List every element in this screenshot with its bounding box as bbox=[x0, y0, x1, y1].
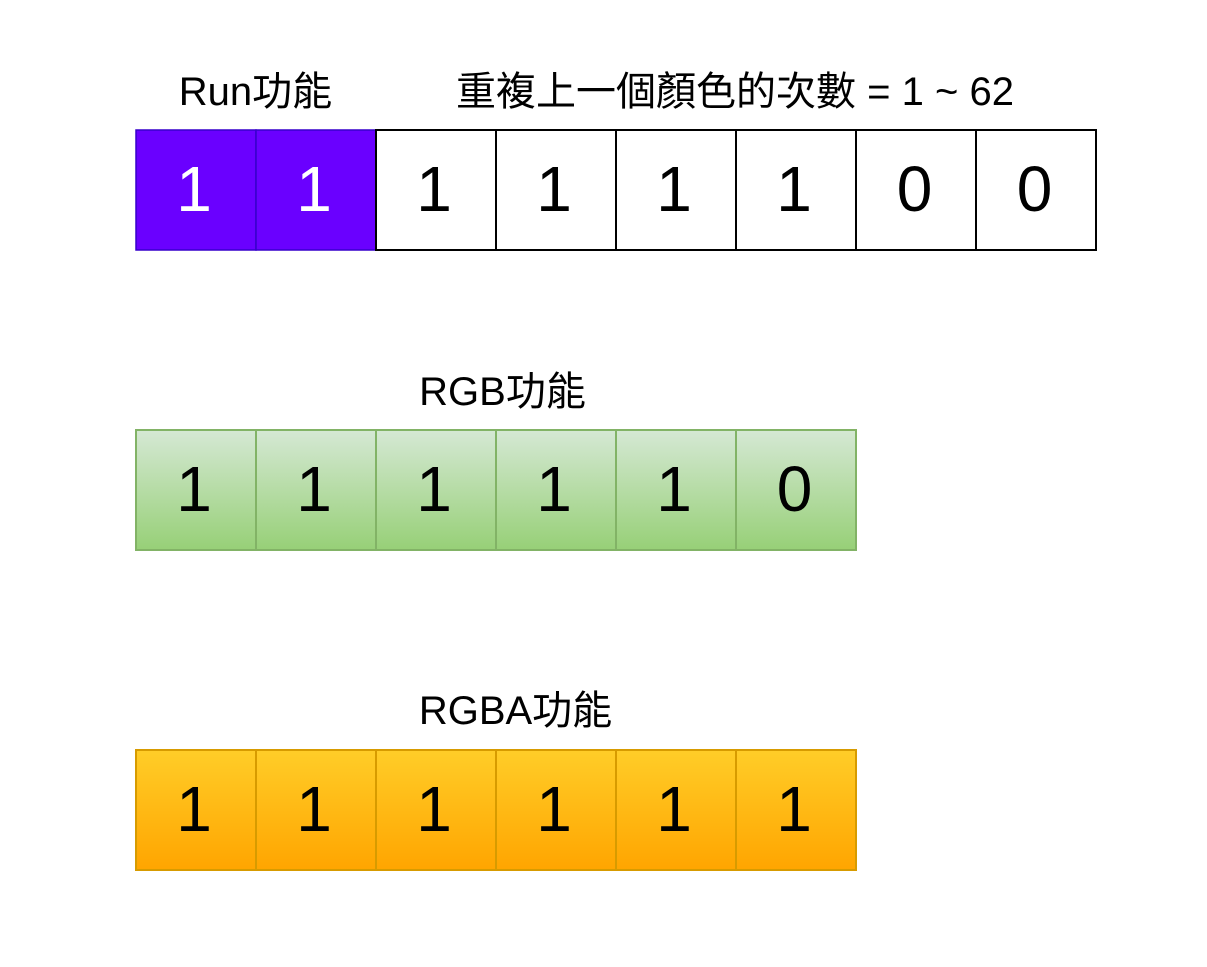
row: RGBA bits: 1 bbox=[656, 773, 692, 845]
heading: RGBA function: RGBA功能 bbox=[419, 689, 612, 733]
row: RGBA bits bbox=[136, 750, 856, 870]
row: Run bits: 1 bbox=[296, 153, 332, 225]
heading: Run function: Run功能 bbox=[179, 70, 332, 114]
row: RGB bits: 1 bbox=[416, 453, 452, 525]
row: Run bits: 1 bbox=[416, 153, 452, 225]
row: RGBA bits: 1 bbox=[296, 773, 332, 845]
heading: RGB function: RGB功能 bbox=[419, 370, 586, 414]
row: RGB bits: 1 bbox=[656, 453, 692, 525]
row: RGB bits: 1 bbox=[536, 453, 572, 525]
row: Run bits: 0 bbox=[897, 153, 932, 225]
row: RGB bits: 1 bbox=[176, 453, 212, 525]
row: RGB bits: 0 bbox=[777, 453, 812, 525]
row: RGBA bits: 1 bbox=[416, 773, 452, 845]
row: Run bits: 1 bbox=[656, 153, 692, 225]
row: RGBA bits: 1 bbox=[776, 773, 812, 845]
row: RGB bits bbox=[136, 430, 856, 550]
heading: repeat count: 重複上一個顏色的次數 = 1 ~ 62 bbox=[456, 70, 1014, 114]
row: Run bits: 1 bbox=[536, 153, 572, 225]
row: RGBA bits: 1 bbox=[536, 773, 572, 845]
row: Run bits: 1 bbox=[776, 153, 812, 225]
row: RGBA bits: 1 bbox=[176, 773, 212, 845]
row: Run bits: 0 bbox=[1017, 153, 1052, 225]
row: Run bits: 1 bbox=[176, 153, 212, 225]
row: RGB bits: 1 bbox=[296, 453, 332, 525]
row: Run bits bbox=[136, 130, 1096, 250]
